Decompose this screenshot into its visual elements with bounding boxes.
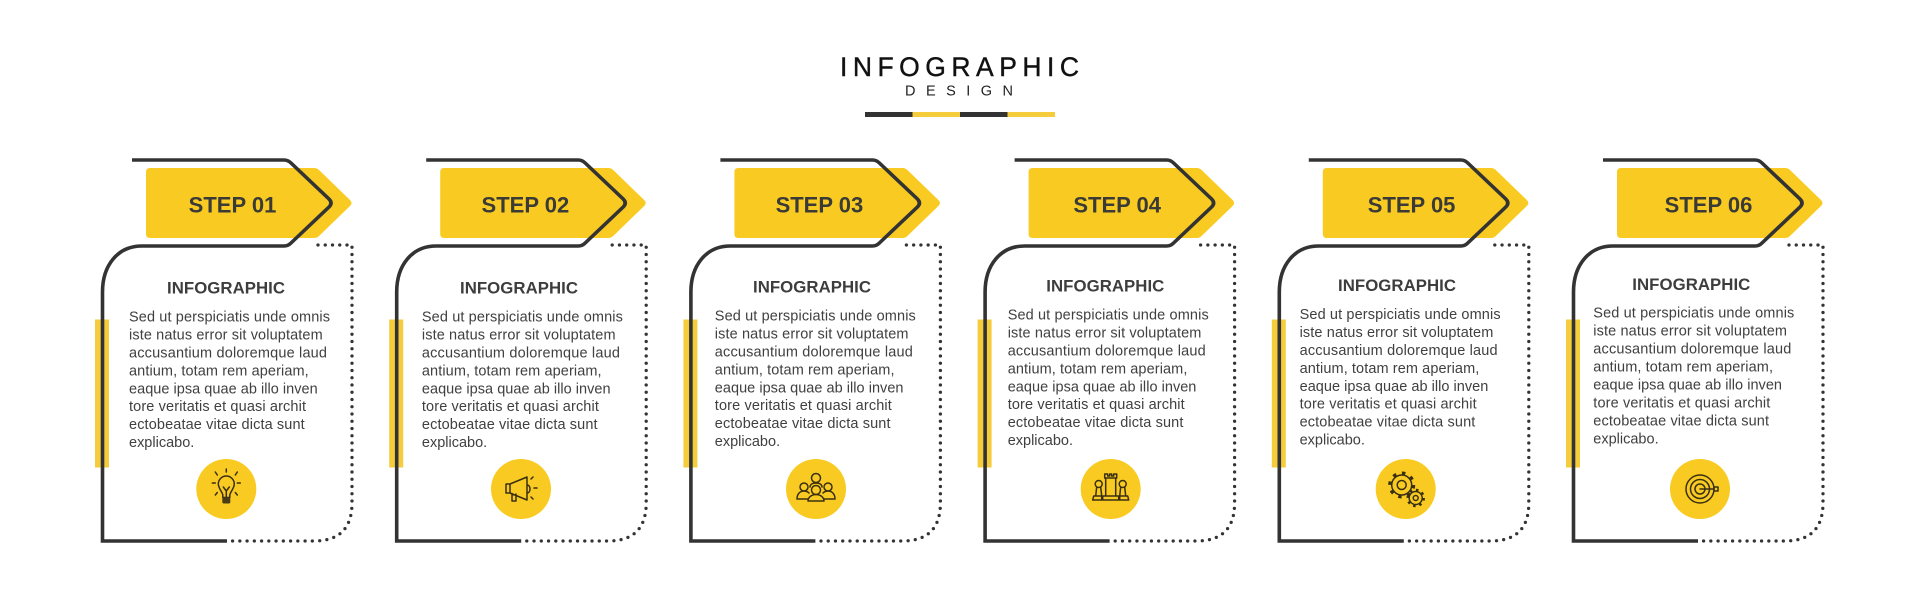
yellow arrow [1617, 168, 1822, 238]
dotted outline [818, 245, 940, 541]
body text: antium, totam rem aperiam, [1300, 361, 1479, 377]
body text: tore veritatis et quasi archit [715, 398, 892, 414]
body text: tore veritatis et quasi archit [1593, 395, 1770, 411]
body text: eaque ipsa quae ab illo inven [715, 380, 904, 396]
card outline [1574, 160, 1802, 541]
title underline bar [865, 112, 1055, 117]
yellow arrow [734, 168, 940, 238]
body text: Sed ut perspiciatis unde omnis [422, 309, 623, 325]
body text: iste natus error sit voluptatem [129, 327, 323, 343]
panel: step 02 [389, 160, 646, 541]
body text: Sed ut perspiciatis unde omnis [715, 308, 916, 324]
body text: antium, totam rem aperiam, [1008, 361, 1187, 377]
dotted outline [1701, 245, 1823, 541]
body text: accusantium doloremque laud [129, 345, 327, 361]
body text: eaque ipsa quae ab illo inven [1593, 378, 1782, 394]
heading: INFOGRAPHIC [1338, 276, 1456, 295]
body text: accusantium doloremque laud [1300, 343, 1498, 359]
left yellow bar [1272, 320, 1286, 468]
body text: explicabo. [715, 434, 780, 450]
body text: accusantium doloremque laud [715, 344, 913, 360]
dotted outline [1407, 245, 1529, 541]
icon: gears [1376, 459, 1436, 519]
dotted outline [1113, 245, 1235, 541]
left yellow bar [978, 320, 992, 468]
card outline [102, 160, 331, 541]
step label: STEP 06 [1665, 193, 1752, 218]
heading: INFOGRAPHIC [753, 278, 871, 296]
body text: Sed ut perspiciatis unde omnis [1008, 307, 1209, 323]
body text: ectobeatae vitae dicta sunt [1300, 415, 1475, 431]
body text: eaque ipsa quae ab illo inven [1300, 379, 1488, 395]
icon: target [1670, 459, 1730, 519]
card outline [397, 160, 625, 541]
icon: chess pieces [1081, 459, 1141, 519]
heading: INFOGRAPHIC [460, 278, 578, 298]
panel: step 04 [978, 160, 1235, 541]
yellow arrow [146, 168, 352, 238]
panel: step 06 [1566, 160, 1823, 541]
yellow arrow [1323, 168, 1528, 238]
body text: tore veritatis et quasi archit [129, 399, 306, 415]
body text: antium, totam rem aperiam, [715, 362, 895, 378]
body text: ectobeatae vitae dicta sunt [1008, 415, 1183, 431]
body text [1593, 306, 1794, 447]
title [840, 52, 1079, 100]
left yellow bar [389, 320, 403, 468]
left yellow bar [1566, 320, 1580, 468]
body text: iste natus error sit voluptatem [1593, 324, 1787, 340]
body text: eaque ipsa quae ab illo inven [422, 381, 611, 397]
body text: eaque ipsa quae ab illo inven [1008, 379, 1196, 395]
body text: Sed ut perspiciatis unde omnis [129, 309, 330, 325]
step label: STEP 05 [1368, 193, 1455, 218]
body text: explicabo. [1300, 433, 1365, 449]
panel: step 01 [95, 160, 352, 541]
step label: STEP 02 [482, 193, 569, 218]
heading: INFOGRAPHIC [1046, 277, 1164, 296]
body text: explicabo. [422, 435, 487, 451]
yellow arrow [440, 168, 646, 238]
body text: accusantium doloremque laud [1593, 342, 1791, 358]
body text: tore veritatis et quasi archit [1300, 397, 1477, 413]
body text [422, 309, 623, 451]
icon: megaphone [491, 459, 551, 519]
body text: antium, totam rem aperiam, [1593, 360, 1773, 376]
body text: explicabo. [129, 435, 194, 451]
heading: INFOGRAPHIC [1632, 275, 1750, 294]
heading: INFOGRAPHIC [167, 278, 285, 298]
left yellow bar [95, 320, 109, 468]
yellow arrow [1029, 168, 1234, 238]
body text: tore veritatis et quasi archit [1008, 397, 1185, 413]
body text: explicabo. [1008, 433, 1073, 449]
title: DESIGN [905, 84, 1013, 100]
body text: iste natus error sit voluptatem [1008, 325, 1201, 341]
body text: eaque ipsa quae ab illo inven [129, 381, 318, 397]
left yellow bar [683, 320, 697, 468]
card outline [1279, 160, 1508, 541]
title: INFOGRAPHIC [840, 52, 1079, 82]
body text: ectobeatae vitae dicta sunt [715, 416, 891, 432]
body text: accusantium doloremque laud [422, 345, 620, 361]
step label: STEP 04 [1073, 193, 1162, 218]
panel: step 05 [1272, 160, 1529, 541]
body text: ectobeatae vitae dicta sunt [422, 417, 598, 433]
body text: tore veritatis et quasi archit [422, 399, 599, 415]
body text [715, 308, 916, 450]
card outline [985, 160, 1214, 541]
body text: ectobeatae vitae dicta sunt [129, 417, 305, 433]
body text [1300, 307, 1501, 449]
icon: team of people [786, 459, 846, 519]
card outline [691, 160, 919, 541]
icon: light bulb [196, 459, 256, 519]
body text: iste natus error sit voluptatem [422, 327, 616, 343]
body text: Sed ut perspiciatis unde omnis [1593, 306, 1794, 322]
panel: step 03 [683, 160, 940, 541]
dotted outline [230, 245, 352, 541]
body text: Sed ut perspiciatis unde omnis [1300, 307, 1501, 323]
body text [1008, 307, 1209, 449]
dotted outline [524, 245, 646, 541]
body text [129, 309, 330, 451]
body text: accusantium doloremque laud [1008, 343, 1206, 359]
step label: STEP 03 [776, 193, 863, 218]
body text: explicabo. [1593, 431, 1659, 447]
body text: ectobeatae vitae dicta sunt [1593, 413, 1769, 429]
body text: iste natus error sit voluptatem [715, 326, 909, 342]
body text: antium, totam rem aperiam, [422, 363, 602, 379]
body text: iste natus error sit voluptatem [1300, 325, 1493, 341]
step label: STEP 01 [189, 193, 276, 218]
body text: antium, totam rem aperiam, [129, 363, 309, 379]
